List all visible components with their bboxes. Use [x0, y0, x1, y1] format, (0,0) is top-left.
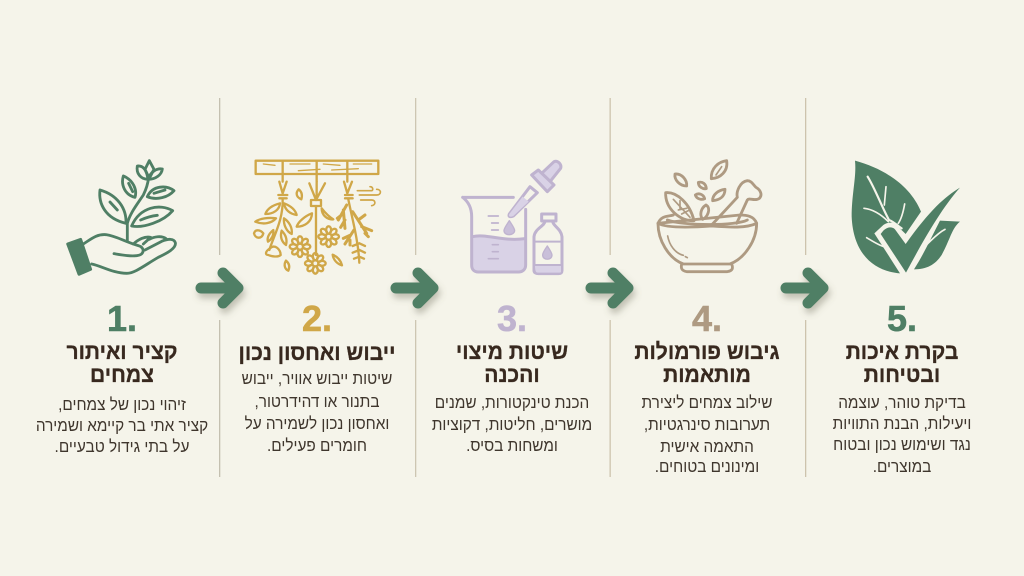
panel: step 4 text: התאמה אישית: [660, 438, 754, 456]
panel: step 2 text: ייבוש ואחסון נכון: [239, 340, 395, 365]
panel: step 4 text: ומינונים בטוחים.: [655, 458, 759, 476]
panel: step 3 text: 3.: [497, 298, 527, 339]
panel: step 5 text: בקרת איכות: [846, 339, 958, 364]
icon: leaf with check mark: [852, 161, 960, 273]
panel: step 2 text: שיטות ייבוש אוויר, ייבוש: [242, 370, 392, 388]
panel: step 1 text: [36, 298, 208, 456]
panel: step 3 text: ומשחות בסיס.: [466, 437, 558, 455]
panel: step 5 text: 5.: [887, 298, 917, 339]
panel: step 3 text: מושרים, חליטות, דקוציות: [432, 416, 592, 434]
panel: step 4 text: גיבוש פורמולות: [634, 339, 780, 364]
panel: step 2 text: 2.: [302, 298, 332, 339]
panel: step 5 text: נגד ושימוש נכון ובטוח: [833, 436, 971, 454]
arrow: step 1 to 2: [201, 273, 240, 308]
icon: beaker, dropper and bottle: [463, 161, 562, 274]
panel: step 5 text: [833, 298, 971, 476]
panel: step 3 text: שיטות מיצוי: [456, 339, 568, 364]
panel: step 2 text: ואחסון נכון לשמירה על: [245, 415, 389, 433]
panel: step 4 text: מותאמות: [663, 362, 751, 387]
panel: step 3 text: והכנה: [484, 362, 540, 387]
icon: hand holding plant: [68, 161, 175, 274]
panel: step 3 text: הכנת טינקטורות, שמנים: [435, 394, 589, 412]
panel: step 5 text: בדיקת טוהר, עוצמה: [838, 394, 966, 412]
panel: step 5 text: ויעילות, הבנת התוויות: [833, 415, 971, 433]
arrow: step 3 to 4: [591, 273, 630, 308]
arrow: step 4 to 5: [786, 273, 825, 308]
panel: step 4 text: תערובות סינרגטיות,: [644, 416, 770, 434]
panel: step 1 text: זיהוי נכון של צמחים,: [58, 396, 186, 414]
panel: step 5 text: במוצרים.: [873, 458, 931, 476]
panel: step 2 text: חומרים פעילים.: [267, 437, 367, 455]
panel: step 1 text: על בתי גידול טבעיים.: [55, 438, 189, 456]
icon: mortar and pestle with herbs: [658, 161, 761, 272]
panel: step 5 text: ובטיחות: [864, 362, 940, 387]
panel: step 1 text: קציר ואיתור: [66, 339, 178, 364]
panel: step 1 text: קציר אתי בר קיימא ושמירה: [36, 417, 208, 435]
panel: step 3 text: [432, 298, 592, 455]
panel: step 4 text: 4.: [692, 298, 722, 339]
icon: drying herbs on a rack: [254, 161, 380, 274]
panel: step 1 text: 1.: [107, 298, 137, 339]
panel: step 2 text: בתנור או דהידרטור,: [254, 393, 379, 411]
panel: step 2 text: [239, 298, 395, 455]
panel: step 1 text: צמחים: [90, 362, 154, 387]
panel: step 4 text: [634, 298, 780, 476]
panel: step 4 text: שילוב צמחים ליצירת: [642, 394, 772, 412]
arrow: step 2 to 3: [396, 273, 435, 308]
